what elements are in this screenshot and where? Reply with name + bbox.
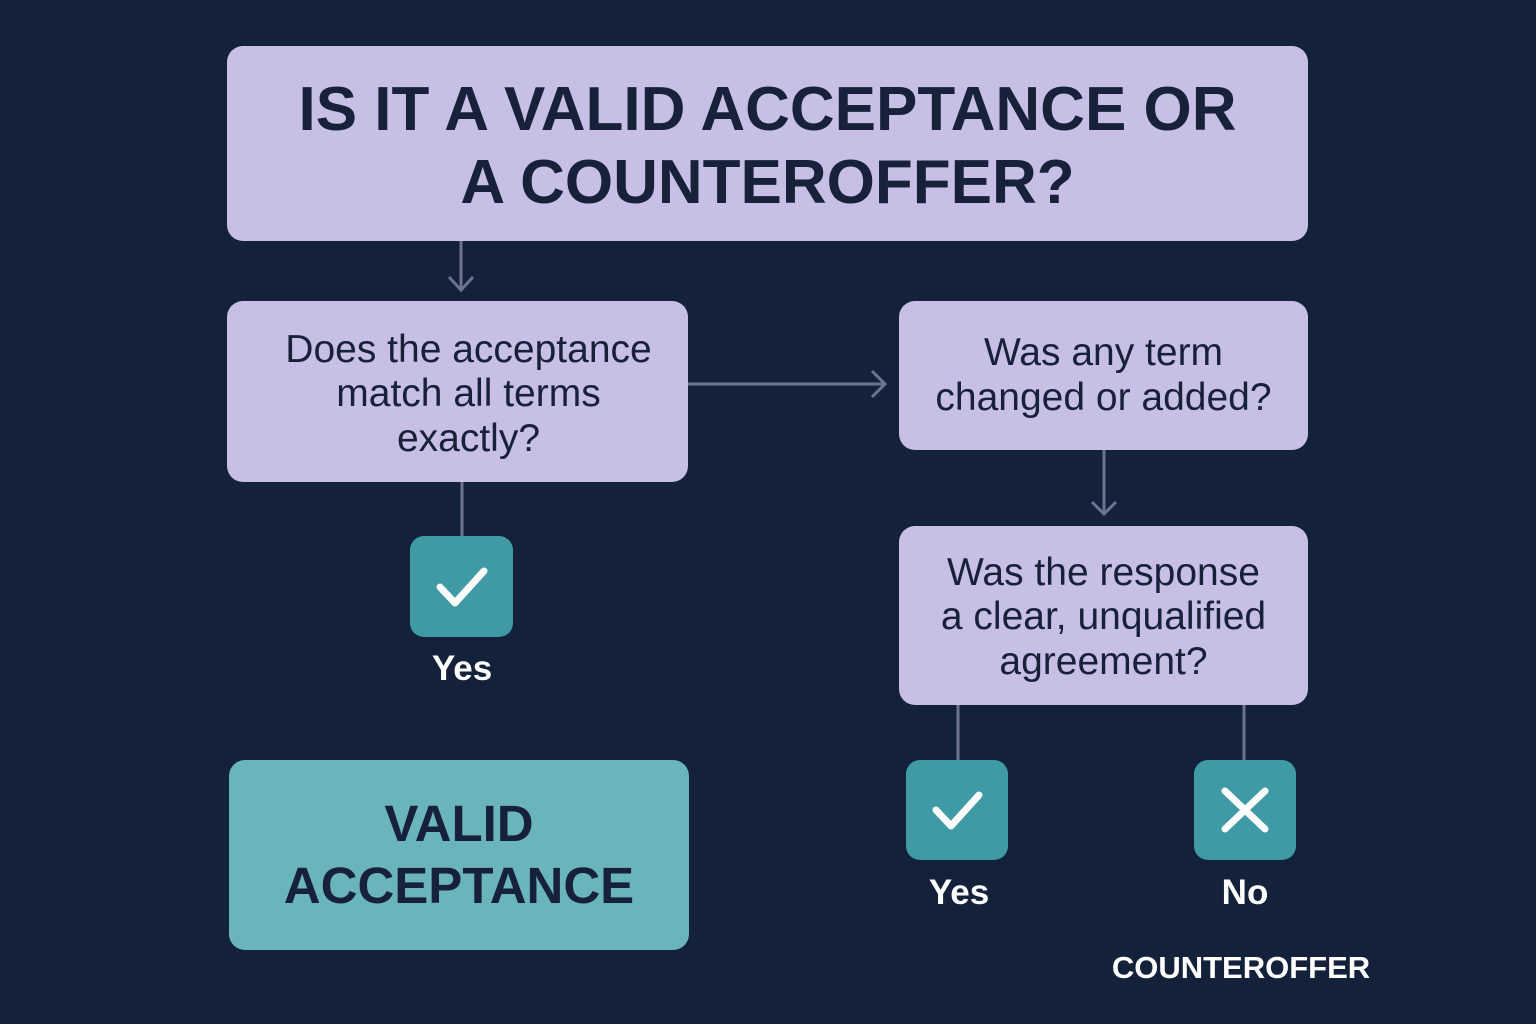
result: valid acceptance: VALID bbox=[384, 795, 534, 852]
question 3: agreement? bbox=[999, 640, 1208, 683]
icon: cross (q3 no) bbox=[1194, 760, 1296, 860]
connector: q3 to yes bbox=[956, 705, 960, 760]
title bbox=[227, 46, 1308, 241]
arrow: question 2 to question 3 bbox=[1092, 450, 1116, 514]
arrow: title to question 1 bbox=[449, 241, 473, 290]
question 1: Does the acceptance bbox=[285, 328, 652, 371]
question 2: changed or added? bbox=[935, 376, 1272, 418]
title: IS IT A VALID ACCEPTANCE OR bbox=[298, 74, 1237, 144]
label: yes: Yes bbox=[929, 873, 989, 912]
question 3: Was the response bbox=[947, 551, 1260, 594]
connector: q1 to yes bbox=[460, 482, 464, 537]
result: counteroffer: COUNTEROFFER bbox=[1112, 950, 1370, 985]
title: A COUNTEROFFER? bbox=[460, 148, 1075, 216]
question 3 bbox=[899, 526, 1308, 705]
label: no: No bbox=[1222, 873, 1268, 912]
icon: check (q3 yes) bbox=[906, 760, 1008, 860]
question 3: a clear, unqualified bbox=[941, 595, 1266, 638]
question 2 bbox=[899, 301, 1308, 450]
icon: check (q1 yes) bbox=[410, 536, 513, 637]
label: yes: Yes bbox=[432, 649, 492, 688]
arrow: question 1 to question 2 bbox=[688, 371, 885, 397]
question 1: match all terms bbox=[336, 372, 601, 415]
result: valid acceptance: ACCEPTANCE bbox=[284, 857, 634, 914]
question 2: Was any term bbox=[984, 331, 1223, 374]
result: valid acceptance bbox=[229, 760, 689, 950]
question 1: exactly? bbox=[397, 417, 540, 460]
question 1 bbox=[227, 301, 688, 482]
connector: q3 to no bbox=[1242, 705, 1246, 760]
